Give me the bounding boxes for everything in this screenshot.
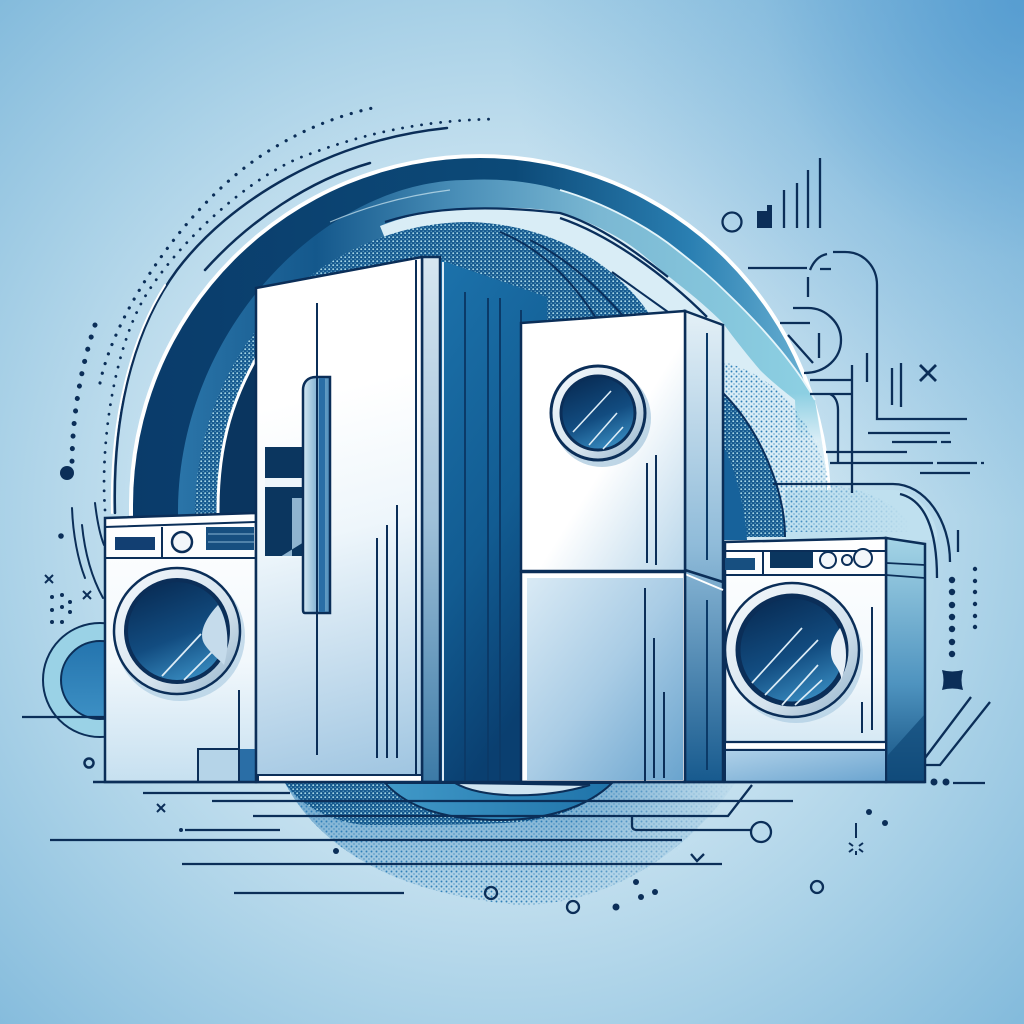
- body: [725, 538, 886, 782]
- left dotted column: [72, 325, 95, 465]
- chevron: [691, 854, 704, 861]
- door: [115, 571, 245, 701]
- refrigerator: tall: [256, 257, 547, 782]
- stippled disc: [195, 222, 785, 537]
- pipes: [748, 252, 967, 419]
- refrigerator: short: [521, 311, 723, 782]
- door lines: [645, 455, 664, 782]
- base box: [198, 749, 239, 782]
- band end fade: [725, 330, 826, 530]
- speed lines, bottom: [22, 697, 990, 893]
- base: [726, 743, 885, 750]
- dark ring: [133, 158, 827, 525]
- dispenser: [265, 447, 304, 557]
- front: [256, 257, 422, 782]
- control panel: [105, 522, 256, 558]
- left curves: [72, 503, 104, 598]
- right diagonals: [925, 697, 990, 765]
- band highlight: [560, 190, 815, 400]
- short arc: [205, 163, 370, 270]
- medium band: [178, 179, 826, 525]
- upper door: [521, 311, 685, 571]
- inner dark wedge left: [218, 355, 258, 525]
- square mark: [942, 670, 963, 690]
- floor stipple disc: [285, 783, 735, 905]
- connector circle: [751, 822, 771, 842]
- side panel: [440, 260, 547, 782]
- outer ring white edge: [129, 154, 831, 525]
- control panel: [725, 551, 886, 575]
- door: [729, 589, 863, 723]
- arcs behind appliances: [129, 154, 937, 540]
- grey strip: [422, 257, 440, 782]
- inner dotted arc: [104, 119, 497, 510]
- porthole: [553, 369, 651, 467]
- band inner pale area: [380, 208, 800, 525]
- body: [105, 513, 256, 782]
- long arc: [115, 128, 447, 513]
- side: [886, 538, 925, 782]
- circuit lines, top right: [722, 158, 984, 578]
- floor line: [93, 781, 925, 783]
- outer dotted arc: [100, 107, 377, 383]
- right pale panel: [785, 490, 937, 540]
- decorative dotted arcs, top left: [60, 107, 497, 598]
- door lines: [317, 303, 397, 758]
- washer: right: [725, 538, 925, 782]
- lower door: [521, 572, 685, 782]
- stipple arcs: [500, 232, 785, 537]
- handle: [303, 377, 330, 613]
- left circle accent: [43, 623, 157, 737]
- scattered marks: [45, 533, 977, 913]
- small crosses and spark: [45, 575, 863, 855]
- inner wedge right: [724, 447, 747, 540]
- x mark: [920, 365, 936, 381]
- washer: left: [105, 513, 256, 782]
- band inner lines: [385, 208, 707, 317]
- side: [685, 311, 723, 782]
- base strip: [258, 775, 422, 782]
- circle and bars: [722, 212, 742, 232]
- horizontal traces: [826, 433, 984, 473]
- right light stipple: [724, 362, 915, 532]
